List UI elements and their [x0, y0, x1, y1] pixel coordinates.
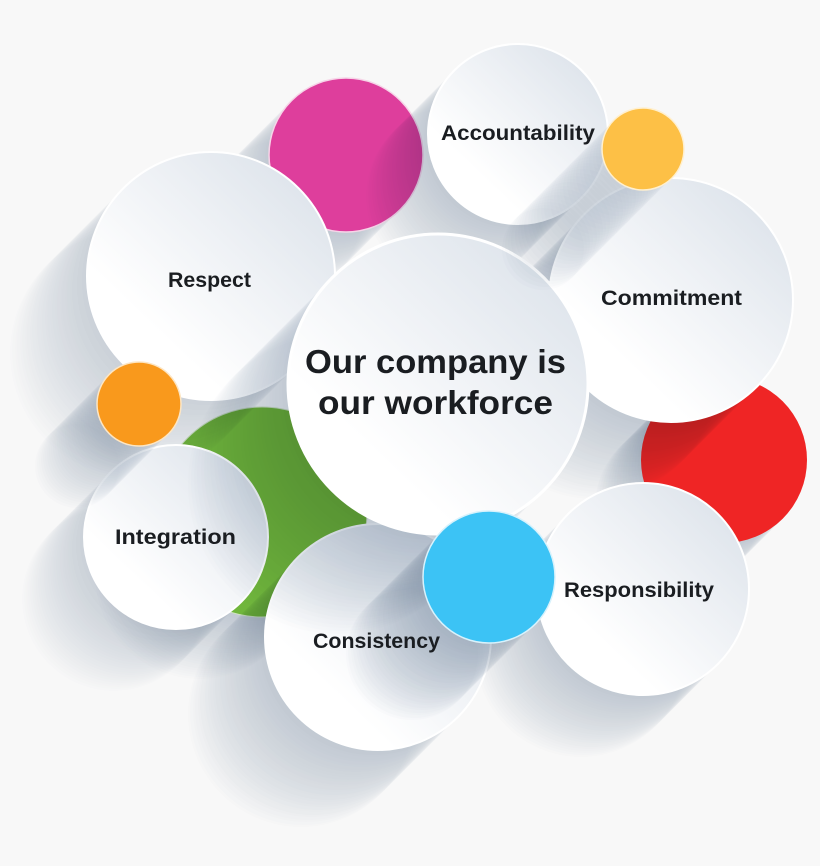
circle: orange [97, 362, 181, 446]
circle: Integration [84, 445, 268, 629]
circle: red [641, 377, 807, 543]
circle: Accountability [428, 44, 608, 224]
label: Responsibility: Responsibility [564, 578, 714, 602]
circle: Respect [87, 152, 335, 400]
circle: magenta [269, 78, 423, 232]
circle: green [157, 407, 367, 617]
title: central statement [305, 343, 566, 421]
circle: Commitment [549, 178, 793, 422]
label: Accountability: Accountability [441, 121, 595, 145]
label: Consistency: Consistency [313, 629, 440, 653]
title: central statement: Our company is [305, 343, 566, 380]
label: Respect: Respect [168, 268, 251, 292]
circle: blue [423, 511, 555, 643]
circle: central [288, 234, 588, 534]
label: Commitment: Commitment [601, 286, 742, 310]
title: central statement: our workforce [318, 384, 553, 421]
circle: Consistency [265, 524, 491, 750]
circle: Responsibility [537, 483, 749, 695]
label: Integration: Integration [115, 525, 236, 549]
circle: yellow [602, 108, 684, 190]
